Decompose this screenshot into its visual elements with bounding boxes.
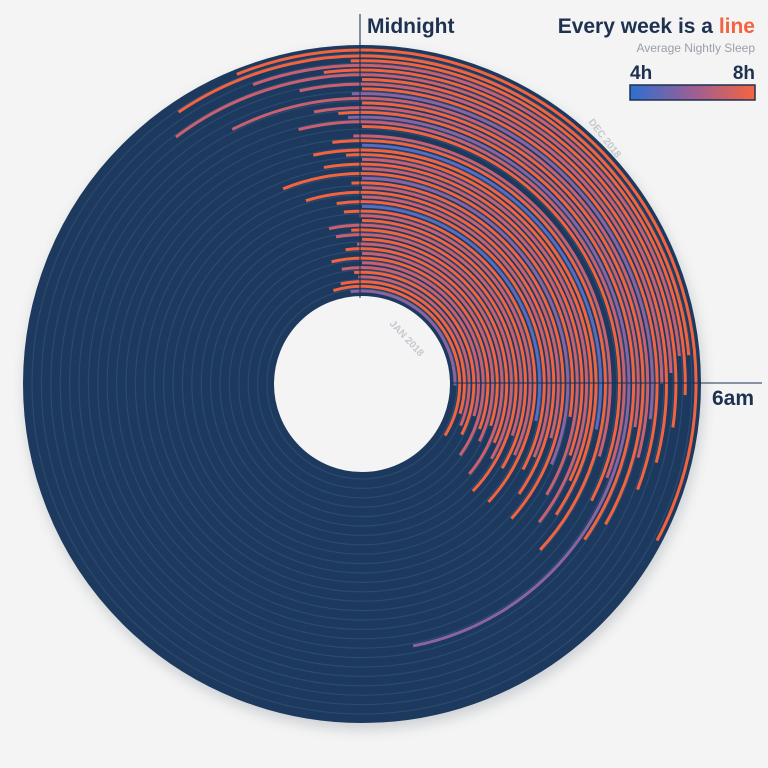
legend max label: 8h <box>733 63 755 84</box>
legend <box>558 15 755 100</box>
legend subtitle: Average Nightly Sleep <box>636 41 755 55</box>
dark disk <box>32 54 692 714</box>
label: JAN 2018: JAN 2018 <box>387 319 426 359</box>
legend title: Every week is a line <box>558 15 755 38</box>
axis: 6am line <box>450 382 762 384</box>
center hole <box>272 294 452 474</box>
label: Midnight: Midnight <box>367 15 454 38</box>
legend gradient bar <box>630 85 755 100</box>
label: 6am: 6am <box>712 387 754 410</box>
legend min label: 4h <box>630 63 652 84</box>
axis: midnight line <box>359 14 361 298</box>
label: DEC 2018: DEC 2018 <box>586 117 623 161</box>
disk shadow <box>24 50 704 730</box>
